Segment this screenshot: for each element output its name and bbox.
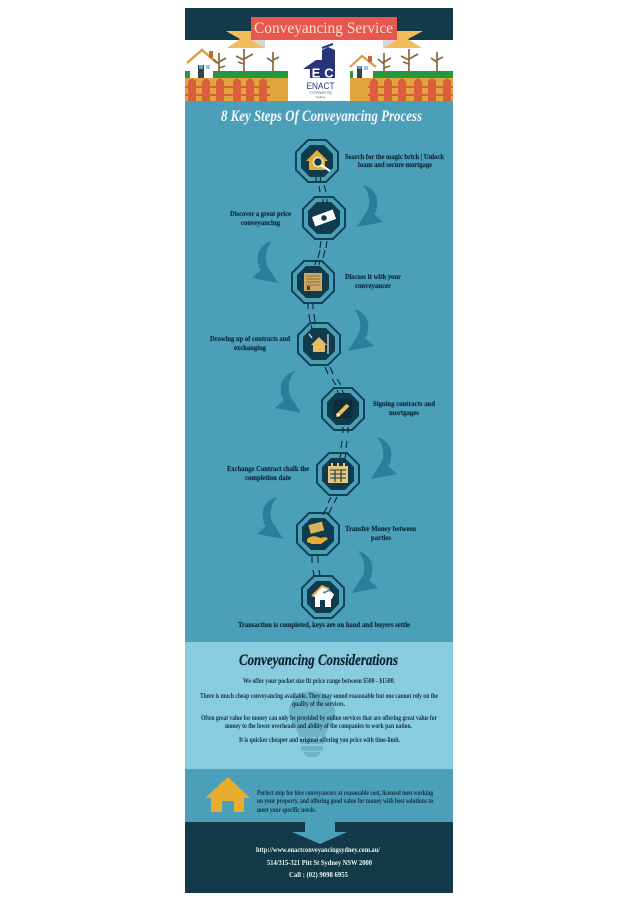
step 2 label (230, 209, 291, 227)
step 8 label: Transaction is completed, keys are on hand and buyers settle (238, 620, 410, 629)
panel: considerations (185, 642, 453, 769)
text block: summary: meet your specific needs. (257, 807, 316, 814)
dashed connectors (308, 177, 348, 576)
text block: considerations: Often great value for money can only be provided by online services that are offering great value for (201, 715, 437, 722)
step 1 label (345, 152, 445, 169)
text block: contact details (256, 845, 381, 879)
step 6 label: Exchange Contract chalk the (227, 464, 309, 473)
step 7 label (345, 524, 417, 542)
step 4 label: Drawing up of contracts and (210, 334, 291, 343)
text block: contact details: 514/315-321 Pitt St Sydney NSW 2000 (267, 858, 372, 867)
text block: summary: Perfect stop for hire conveyancers at reasonable cost, licensed men working (257, 790, 433, 797)
panel: contact footer (185, 822, 453, 893)
heading: 8 key steps: 8 Key Steps Of Conveyancing Process (221, 108, 422, 125)
icon: yellow house (205, 777, 250, 812)
step 6 label: completion date (245, 473, 291, 482)
step 3 label (345, 272, 401, 290)
banner ribbon (226, 17, 423, 48)
step 2 label: Discover a great price (230, 209, 291, 218)
step 6: calendar (317, 453, 359, 495)
step 7: money in hand (297, 513, 339, 555)
logo: Enact Conveyancing: C (324, 66, 334, 80)
step 4 label: exchanging (234, 343, 266, 352)
arrow: down to contact (292, 822, 347, 844)
step 2: banknotes (303, 197, 345, 239)
step 4: house drawing (298, 323, 340, 365)
step 3 label: Discuss it with your (345, 272, 401, 281)
step 6 label (227, 464, 309, 482)
step 8: house with keys (302, 576, 344, 618)
step 1: search (296, 140, 338, 182)
step 5 label: mortgages (389, 408, 419, 417)
left yard scene (185, 49, 288, 101)
step 5 label: Signing contracts and (373, 399, 436, 408)
step 3: document (292, 261, 334, 303)
logo: Enact Conveyancing: E (312, 66, 321, 80)
logo: Enact Conveyancing: ENACT (306, 81, 335, 91)
text block: considerations (200, 678, 438, 744)
step 2 label: conveyancing (241, 218, 280, 227)
panel: header band (185, 8, 453, 40)
step 5 label (373, 399, 436, 417)
step 5: pencil (322, 388, 364, 430)
curved arrows (252, 185, 397, 593)
text block: considerations: It is quicker cheaper and original offering you price with time-limit. (239, 737, 400, 744)
panel: summary band (185, 769, 453, 822)
text block: considerations: quality of the services. (292, 701, 345, 708)
logo: Enact Conveyancing: Conveyancing (309, 90, 332, 94)
panel: white scene strip (185, 40, 453, 101)
step 7 label: parties (371, 533, 391, 542)
banner ribbon: Conveyancing Service (254, 20, 393, 37)
panel: 8 key steps (185, 101, 453, 642)
text block: considerations: money to the lower overheads and ability of the companies to work pan nation. (225, 723, 412, 730)
text block: summary (257, 790, 433, 814)
text block: considerations: There is much cheap conveyancing available. They may sound reasonable but one cannot rely on the (200, 693, 438, 700)
step 3 label: conveyancer (355, 281, 391, 290)
step 4 label (210, 334, 291, 352)
step 1 label: Search for the magic brick | Unlock (345, 152, 445, 161)
text block: contact details: Call : (02) 9098 6955 (289, 870, 348, 879)
logo: Enact Conveyancing: Sydney (315, 95, 326, 99)
right yard scene (350, 49, 453, 101)
icon: light bulb watermark (289, 691, 335, 757)
step 7 label: Transfer Money between (345, 524, 417, 533)
text block: summary: on your property, and offering good value for money with best solutions to (257, 798, 433, 805)
logo: Enact Conveyancing (303, 44, 335, 99)
heading: conveyancing considerations: Conveyancing Considerations (239, 652, 398, 669)
text block: contact details: http://www.enactconveyancingsydney.com.au/ (256, 845, 381, 854)
step 1 label: loans and secure mortgage (358, 160, 432, 169)
text block: considerations: We offer your pocket size fit price range between $500 - $1500. (243, 678, 395, 685)
